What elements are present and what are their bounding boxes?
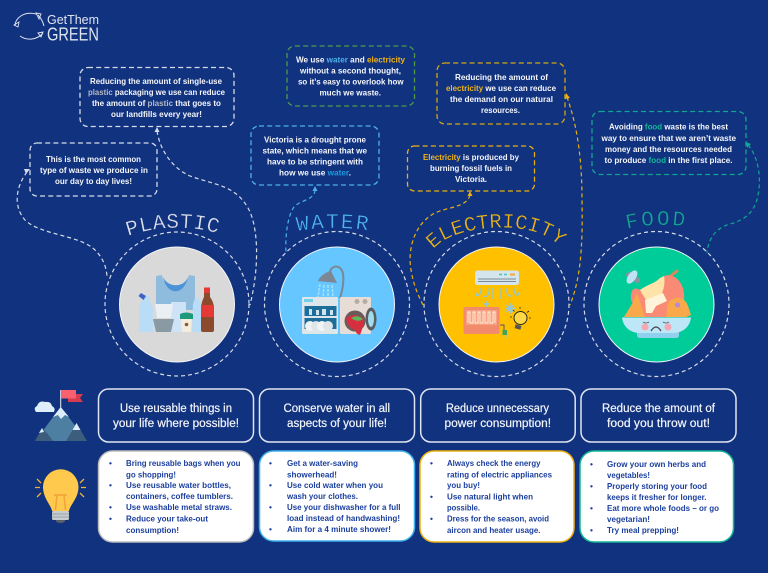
tips panel: food: vegetarian! xyxy=(607,514,650,524)
connector: electricity to demand callout xyxy=(565,93,582,305)
tips panel: food: Grow your own herbs and xyxy=(607,459,706,469)
heading: WATER xyxy=(295,214,368,231)
tips panel: water: • xyxy=(269,524,272,534)
callout: reduce electricity demand: Reducing the amount of xyxy=(455,72,548,82)
tips panel: food: Try meal prepping! xyxy=(607,525,679,535)
connector: water to drought callout xyxy=(286,186,318,252)
heading: FOOD xyxy=(626,210,684,228)
ring: water xyxy=(264,232,410,376)
header: water action: aspects of your life! xyxy=(287,418,387,430)
callout: fossil fuels: Victoria. xyxy=(455,174,487,184)
callout: food waste: Avoiding food waste is the best xyxy=(609,122,728,132)
tips panel: food: • xyxy=(590,459,593,469)
callout: single-use plastic: our landfills every year! xyxy=(111,109,202,119)
icon: plastic items xyxy=(120,247,234,362)
callout: reduce electricity demand: electricity we use can reduce xyxy=(446,83,556,93)
tips panel: electricity: Use natural light when xyxy=(447,492,533,502)
heading: PLASTIC xyxy=(126,214,219,236)
tips panel: food: • xyxy=(590,481,593,491)
header: electricity action xyxy=(421,389,575,442)
callout: water and electricity: so it’s easy to overlook how xyxy=(298,76,404,86)
tips panel: electricity: • xyxy=(430,492,433,502)
tips panel: food: keeps it fresher for longer. xyxy=(607,492,706,502)
callout: food waste xyxy=(592,112,746,174)
tips panel: water: • xyxy=(269,480,272,490)
tips panel: plastic: • xyxy=(109,502,112,512)
tips panel: plastic: • xyxy=(109,458,112,468)
ring: electricity xyxy=(424,232,569,376)
tips panel: plastic: Reduce your take-out xyxy=(126,514,208,524)
heading: FOOD: FOOD xyxy=(626,210,684,228)
callout: reduce electricity demand: the demand on our natural xyxy=(450,94,553,104)
ring: plastic xyxy=(105,232,249,376)
header: plastic action: your life where possible! xyxy=(113,418,239,430)
callout: single-use plastic: plastic packaging we use can reduce xyxy=(88,87,225,97)
header: food action xyxy=(581,389,736,442)
connector: plastic to common waste callout xyxy=(17,169,107,276)
logo: Get Them Green: GetThem xyxy=(47,13,99,27)
connector: plastic to landfill callout xyxy=(154,127,257,305)
callout: drought prone state xyxy=(251,126,379,185)
header: electricity action: Reduce unnecessary xyxy=(446,403,549,415)
callout: single-use plastic xyxy=(80,68,234,126)
tips panel: plastic xyxy=(98,451,254,542)
tips panel: electricity: Always check the energy xyxy=(447,458,541,468)
callout: food waste: way to ensure that we aren’t waste xyxy=(601,133,736,143)
callout: most common waste: This is the most common xyxy=(46,154,141,164)
tips panel: electricity: Dress for the season, avoid xyxy=(447,514,549,524)
header: plastic action: Use reusable things in xyxy=(120,403,232,415)
callout: food waste: to produce food in the first place. xyxy=(604,155,732,165)
tips panel: water xyxy=(260,451,414,541)
tips panel: water: • xyxy=(269,502,272,512)
tips panel: food: • xyxy=(590,525,593,535)
tips panel: plastic: containers, coffee tumblers. xyxy=(126,491,233,501)
tips panel: electricity xyxy=(420,451,574,542)
tips panel: water: showerhead! xyxy=(287,470,337,480)
callout: most common waste: type of waste we produce in xyxy=(40,165,148,175)
tips panel: plastic: Use washable metal straws. xyxy=(126,502,232,512)
icon: shower, dishwasher and washing machine xyxy=(280,247,394,362)
callout: water and electricity: We use water and electricity xyxy=(296,54,405,64)
icon: light bulb xyxy=(35,469,86,523)
tips panel: plastic: • xyxy=(109,514,112,524)
tips panel: electricity: possible. xyxy=(447,502,480,512)
icon: sad food bowl xyxy=(599,247,714,362)
tips panel: electricity: aircon and heater usage. xyxy=(447,525,540,535)
header: water action: Conserve water in all xyxy=(284,403,390,415)
connector: electricity to fossil fuels callout xyxy=(410,191,472,305)
callout: reduce electricity demand: resources. xyxy=(481,105,520,115)
callout: most common waste xyxy=(30,143,157,196)
callout: single-use plastic: Reducing the amount of single-use xyxy=(90,76,222,86)
callout: fossil fuels: burning fossil fuels in xyxy=(430,163,512,173)
tips panel: food: vegetables! xyxy=(607,470,650,480)
tips panel: water: load instead of handwashing! xyxy=(287,513,400,523)
callout: drought prone state: have to be stringent with xyxy=(267,156,363,166)
tips panel: plastic: consumption! xyxy=(126,525,179,535)
callout: food waste: money and the resources needed xyxy=(605,144,732,154)
tips panel: electricity: rating of electric appliances xyxy=(447,470,552,480)
callout: single-use plastic: the amount of plastic that goes to xyxy=(92,98,221,108)
tips panel: food: • xyxy=(590,503,593,513)
heading: PLASTIC: PLASTIC xyxy=(126,214,219,236)
callout: fossil fuels xyxy=(408,146,534,191)
callout: water and electricity: without a second thought, xyxy=(299,66,401,76)
callout: drought prone state: state, which means that we xyxy=(262,146,367,156)
callout: water and electricity xyxy=(287,46,414,106)
callout: drought prone state: how we use water. xyxy=(279,168,351,178)
connector: food to waste callout xyxy=(707,142,759,253)
logo: Get Them Green: GREEN xyxy=(47,24,99,44)
tips panel: plastic: • xyxy=(109,480,112,490)
callout: reduce electricity demand xyxy=(437,63,565,124)
ring: food xyxy=(584,232,729,376)
tips panel: food: Eat more whole foods – or go xyxy=(607,503,719,513)
heading: WATER: WATER xyxy=(295,214,368,231)
icon: air conditioner, heater and light bulb xyxy=(439,247,554,362)
header: food action: Reduce the amount of xyxy=(602,403,716,415)
tips panel: water: Aim for a 4 minute shower! xyxy=(287,524,391,534)
tips panel: food: Properly storing your food xyxy=(607,481,707,491)
tips panel: plastic: Bring reusable bags when you xyxy=(126,458,240,468)
header: water action xyxy=(260,389,414,442)
logo: Get Them Green xyxy=(14,13,99,44)
tips panel: food xyxy=(580,451,734,542)
tips panel: water: • xyxy=(269,458,272,468)
tips panel: electricity: • xyxy=(430,458,433,468)
header: plastic action xyxy=(98,389,254,442)
header: electricity action: power consumption! xyxy=(444,418,551,430)
tips panel: electricity: you buy! xyxy=(447,480,480,490)
heading: ELECTRICITY: ELECTRICITY xyxy=(425,214,568,248)
tips panel: water: Use cold water when you xyxy=(287,480,383,490)
callout: fossil fuels: Electricity is produced by xyxy=(423,152,519,162)
header: food action: food you throw out! xyxy=(607,418,710,430)
tips panel: plastic: go shopping! xyxy=(126,470,176,480)
callout: drought prone state: Victoria is a drought prone xyxy=(264,134,366,144)
callout: water and electricity: much we waste. xyxy=(320,88,381,98)
tips panel: water: Use your dishwasher for a full xyxy=(287,502,400,512)
tips panel: water: Get a water-saving xyxy=(287,458,358,468)
tips panel: electricity: • xyxy=(430,514,433,524)
tips panel: water: wash your clothes. xyxy=(286,491,358,501)
tips panel: plastic: Use reusable water bottles, xyxy=(126,480,231,490)
callout: most common waste: our day to day lives! xyxy=(55,176,132,186)
icon: mountain with flag xyxy=(35,390,87,441)
